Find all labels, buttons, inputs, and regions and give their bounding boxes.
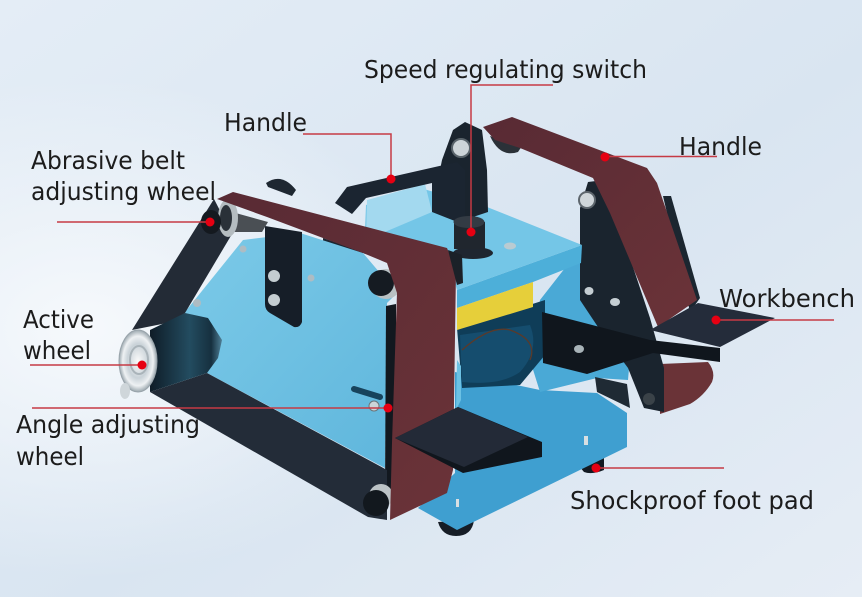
- bottom black belt: [150, 373, 387, 520]
- callout: abrasive belt adjusting wheel: adjusting wheel: [31, 177, 216, 206]
- belt sander machine: [119, 117, 775, 536]
- rear black strip: [663, 196, 700, 312]
- handle bar: [335, 162, 465, 225]
- adjuster screws: [268, 270, 280, 306]
- callout: handle right: [600, 132, 762, 162]
- right bracket: [542, 312, 720, 374]
- base pins: [456, 436, 588, 507]
- lower dark tab: [595, 377, 630, 408]
- speed knob: [453, 216, 493, 259]
- yellow label: [457, 282, 533, 330]
- callout: active wheel: Active: [23, 305, 94, 334]
- left mount plate back: [185, 233, 397, 468]
- handle lower block: [323, 238, 363, 261]
- roller top right: [368, 269, 401, 299]
- side plate pins: [584, 287, 620, 306]
- rear sanding belt: [483, 117, 697, 327]
- callout: workbench: Workbench: [719, 284, 855, 313]
- motor wires: [462, 329, 532, 360]
- left top knob: [266, 179, 296, 196]
- foot: front rubber pad: [438, 520, 474, 536]
- nut beside belt: [448, 250, 463, 285]
- angle screw: [369, 401, 379, 411]
- base plate: [418, 372, 627, 530]
- callout: shockproof foot pad: Shockproof foot pad: [570, 486, 814, 515]
- motor housing: [460, 325, 533, 383]
- callout: handle left: Handle: [224, 108, 307, 137]
- callout: angle adjusting wheel: wheel: [16, 442, 84, 471]
- rear arm: [580, 180, 664, 412]
- callout: workbench: [712, 284, 855, 324]
- drive cone: [150, 313, 222, 392]
- callout: handle left: [224, 108, 396, 184]
- callout: speed regulating switch: Speed regulating switch: [364, 55, 647, 84]
- rear arm bolt: [643, 393, 655, 405]
- right workbench top: [650, 303, 775, 347]
- black inner strip: [385, 304, 396, 500]
- upper rear arm nut: [452, 139, 470, 157]
- callout: angle adjusting wheel: Angle adjusting: [16, 410, 200, 439]
- rear arm nut: [579, 192, 595, 208]
- callout: active wheel: [23, 305, 146, 370]
- callout: shockproof foot pad: [570, 464, 814, 515]
- wing screw: [120, 383, 130, 399]
- callout: speed regulating switch: [364, 55, 647, 236]
- callout: active wheel: wheel: [23, 336, 91, 365]
- front workbench: [395, 407, 542, 473]
- callout: abrasive belt adjusting wheel: [31, 146, 216, 226]
- upper rear arm: [432, 122, 488, 222]
- roller bottom: [363, 484, 393, 516]
- deck top: [364, 188, 582, 290]
- callout: handle right: Handle: [679, 132, 762, 161]
- deck highlight inside handle: [366, 184, 432, 240]
- bracket screw: [574, 345, 584, 353]
- right side plate: [530, 245, 635, 392]
- deck screw: [504, 242, 516, 250]
- left sanding belt: [217, 192, 456, 520]
- callout: abrasive belt adjusting wheel: Abrasive belt: [31, 146, 185, 175]
- motor cavity: [457, 300, 545, 388]
- foot: rear rubber pad: [579, 458, 604, 473]
- plate screws: [193, 246, 314, 307]
- vertical adjuster bracket: [265, 226, 302, 327]
- motor side panel: [456, 360, 461, 410]
- angle slot: [354, 389, 380, 397]
- left black belt diagonal: [132, 199, 232, 330]
- roller top left: [201, 199, 268, 237]
- rear belt lower loop: [660, 362, 713, 414]
- active wheel: [119, 330, 157, 392]
- rear belt spring roller: [490, 136, 522, 153]
- deck front face: [457, 245, 582, 308]
- callout: angle adjusting wheel: [16, 404, 392, 471]
